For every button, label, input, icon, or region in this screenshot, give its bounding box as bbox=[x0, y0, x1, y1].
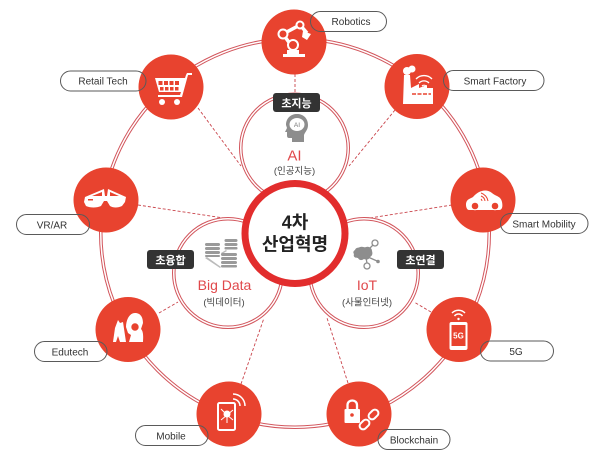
label: VR/AR: VR/AR bbox=[37, 220, 67, 232]
label: Mobile: Mobile bbox=[156, 432, 186, 442]
icon: AI head: AI bbox=[294, 122, 300, 129]
label: VR/AR bbox=[16, 214, 90, 234]
label: 5G bbox=[480, 341, 554, 361]
icon: cart bbox=[155, 73, 192, 105]
panel: AI ring bbox=[240, 93, 350, 203]
outer double ring bbox=[100, 38, 490, 428]
title: 4차 bbox=[282, 212, 309, 232]
icon: goggles bbox=[84, 189, 126, 208]
icon: edu bbox=[113, 313, 143, 342]
label: Retail Tech: Retail Tech bbox=[78, 76, 128, 88]
label: Edutech bbox=[34, 342, 107, 362]
label: Edutech: Edutech bbox=[52, 348, 88, 358]
node: Mobile bbox=[196, 382, 262, 446]
icon: mobile bbox=[218, 394, 245, 430]
icon: lock and chain bbox=[344, 400, 380, 431]
label: Robotics bbox=[310, 12, 386, 32]
heading: Big Data: Big Data bbox=[198, 277, 252, 293]
node: Robotics bbox=[262, 10, 326, 74]
central circle bbox=[245, 184, 345, 284]
text: 인공지능: (인공지능) bbox=[274, 166, 315, 177]
icon: databases bbox=[205, 239, 238, 268]
label: Smart Factory bbox=[444, 70, 544, 90]
dashed connectors bbox=[138, 74, 452, 384]
heading: IoT: IoT bbox=[357, 277, 378, 293]
icon: factory bbox=[403, 66, 433, 104]
tag: 초연결 bbox=[397, 250, 444, 269]
node: Smart Mobility bbox=[450, 168, 516, 232]
label: Blockchain bbox=[378, 430, 450, 450]
label: Smart Mobility bbox=[500, 214, 588, 234]
panel: IoT ring bbox=[308, 218, 420, 328]
label: Mobile bbox=[136, 426, 208, 446]
title: 산업혁명 bbox=[262, 234, 328, 254]
node: Edutech bbox=[96, 297, 160, 362]
node: VR/AR bbox=[74, 168, 138, 232]
label: Smart Mobility: Smart Mobility bbox=[512, 220, 576, 230]
label: 5G: 5G bbox=[509, 347, 523, 358]
panel: Big Data ring bbox=[172, 218, 284, 328]
label: Blockchain: Blockchain bbox=[390, 436, 438, 446]
node: 5G bbox=[426, 297, 492, 362]
text: 사물인터넷: (사물인터넷) bbox=[342, 298, 392, 308]
tag: 초지능: 초지능 bbox=[281, 97, 312, 110]
tag: 초지능 bbox=[273, 93, 320, 112]
icon: robot arm bbox=[278, 22, 311, 57]
label: Retail Tech bbox=[60, 71, 146, 91]
node: Blockchain bbox=[326, 382, 392, 446]
tag: 초융합 bbox=[147, 250, 194, 269]
icon: car bbox=[466, 190, 502, 210]
node: Smart Factory bbox=[384, 54, 450, 119]
tag: 초연결: 초연결 bbox=[405, 254, 436, 267]
text: 빅데이터: (빅데이터) bbox=[203, 298, 245, 308]
tag: 초융합: 초융합 bbox=[155, 253, 186, 267]
icon: 5G phone: 5G bbox=[453, 332, 464, 340]
icon: IoT cloud bbox=[353, 240, 380, 269]
node: Retail Tech bbox=[138, 54, 204, 120]
heading: AI: AI bbox=[287, 148, 302, 164]
label: Robotics: Robotics bbox=[332, 17, 370, 28]
label: Smart Factory: Smart Factory bbox=[464, 76, 526, 88]
